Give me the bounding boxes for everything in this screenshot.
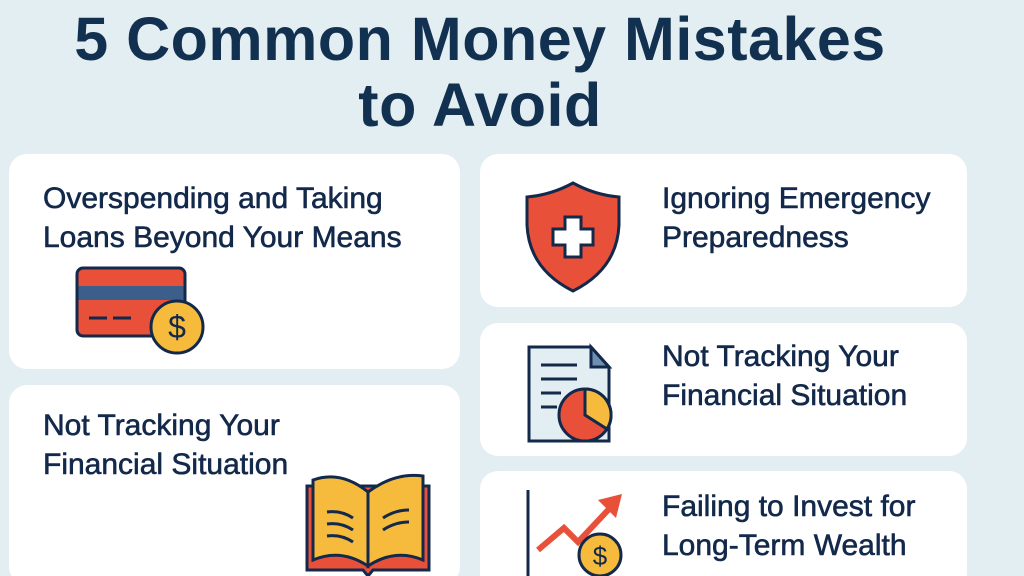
heading: overspending: Overspending and Taking — [43, 182, 383, 215]
title: 5 Common Money Mistakes — [74, 5, 886, 73]
heading: not tracking right: Financial Situation — [662, 379, 907, 412]
heading: not tracking left — [43, 409, 288, 481]
heading: invest: Long-Term Wealth — [662, 529, 907, 562]
heading: emergency — [662, 182, 931, 254]
icon: document with pie — [528, 343, 613, 442]
panel: emergency — [480, 154, 967, 307]
heading: invest: Failing to Invest for — [662, 490, 915, 523]
icon: shield with cross — [526, 181, 620, 293]
heading: overspending: Loans Beyond Your Means — [43, 221, 402, 254]
icon: open book — [306, 474, 430, 576]
heading: emergency: Ignoring Emergency — [662, 182, 930, 215]
heading: not tracking left: Financial Situation — [43, 448, 288, 481]
title — [74, 5, 886, 139]
icon: growth chart with coin — [526, 490, 622, 576]
heading: not tracking right — [662, 340, 907, 412]
title: to Avoid — [358, 71, 602, 139]
icon: growth chart with coin: $ — [593, 541, 608, 571]
icon: credit card with coin — [76, 266, 204, 354]
heading: emergency: Preparedness — [662, 221, 849, 254]
icon: credit card with coin: $ — [168, 309, 186, 345]
panel: invest — [480, 471, 967, 576]
panel: overspending — [9, 154, 460, 369]
heading: not tracking left: Not Tracking Your — [43, 409, 280, 442]
panel: not tracking (right) — [480, 323, 967, 456]
heading: overspending — [43, 182, 402, 254]
heading: invest — [662, 490, 916, 562]
heading: not tracking right: Not Tracking Your — [662, 340, 899, 373]
panel: not tracking (left) — [9, 385, 460, 576]
